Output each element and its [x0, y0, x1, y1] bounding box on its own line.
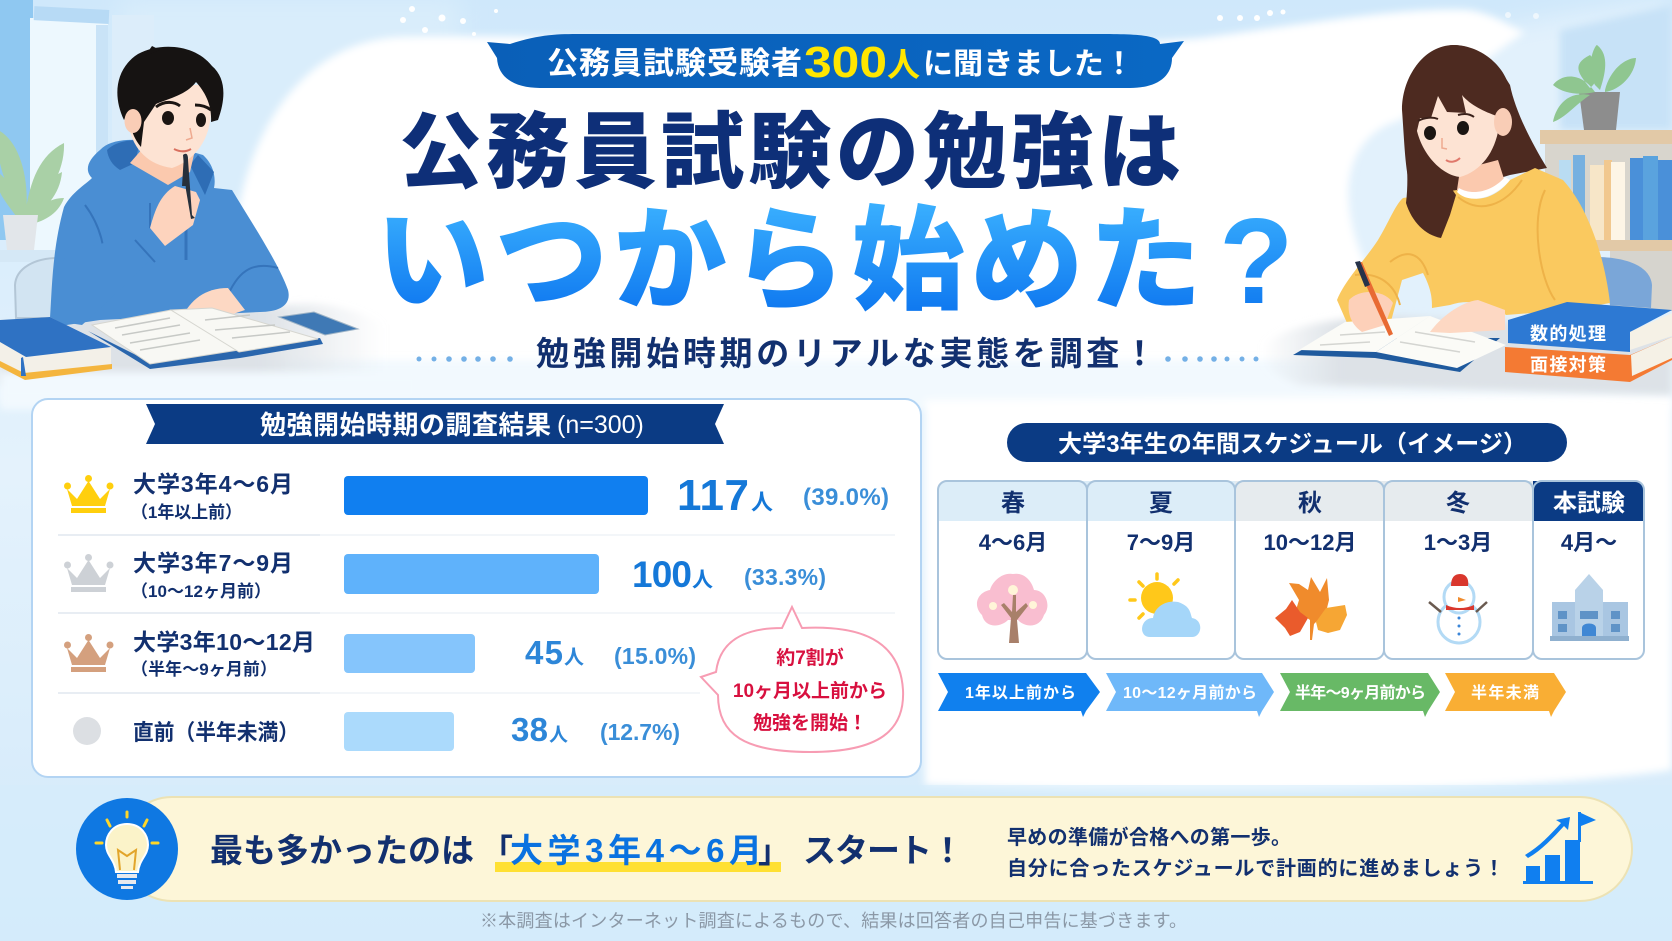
supporting message: 自分に合ったスケジュールで計画的に進めましょう！ [1007, 857, 1504, 880]
title underline [390, 317, 1250, 319]
blue book [0, 317, 111, 378]
row 2: July to September: 大学3年7〜9月 [133, 550, 293, 576]
row 2: July to September: 人 [692, 569, 713, 592]
row 1: April to June [64, 471, 889, 522]
neck [130, 140, 195, 185]
desk [0, 304, 385, 385]
eyes, brows, nose, mouth [162, 111, 174, 125]
supporting message: 早めの準備が合格への第一歩。 [1007, 825, 1291, 849]
column: autumn: 10〜12月 [1264, 530, 1356, 555]
main message [210, 832, 964, 872]
sweater [1337, 168, 1610, 325]
arrow: under half a year [1445, 673, 1566, 717]
top pill: survey intro: 300 [804, 38, 887, 87]
column: winter [1424, 490, 1492, 643]
row 3: October to December: (15.0%) [614, 643, 696, 669]
row 4: just before [73, 711, 680, 751]
row 4: just before: 人 [549, 725, 568, 746]
arrow: half year to 9 months: 半年〜9ヶ月前から [1295, 683, 1426, 702]
main message: 最も多かったのは [210, 832, 474, 869]
column: spring: 4〜6月 [979, 530, 1047, 555]
plant [0, 130, 64, 250]
panel heading ribbon: 勉強開始時期の調査結果 [260, 410, 551, 440]
main message: 大学3年4〜6月 [510, 832, 762, 869]
subtitle: 勉強開始時期のリアルな実態を調査！ [536, 335, 1156, 372]
icon: cherry tree [977, 574, 1047, 643]
icon: rising bars with flag [1523, 812, 1596, 884]
row 4: just before: 38 [511, 711, 548, 748]
illustration: female student [1260, 45, 1672, 395]
icon: maple leaves [1275, 577, 1347, 640]
column: winter: 1〜3月 [1424, 530, 1492, 555]
top pill: survey intro: 人 [887, 46, 920, 83]
row 2: July to September [64, 550, 826, 601]
title line 2: ? [1219, 193, 1294, 329]
panel: survey results [32, 399, 921, 777]
icon: grey circle [73, 717, 101, 745]
neck and collar [1457, 160, 1505, 196]
callout: about 70 percent: 勉強を開始！ [753, 712, 867, 734]
column: spring [977, 490, 1047, 643]
top pill: survey intro: に聞きました！ [923, 48, 1134, 81]
row 1: April to June: 大学3年4〜6月 [133, 471, 293, 497]
icon: bronze crown [64, 634, 114, 672]
arrow: under half a year: 半年未満 [1471, 683, 1539, 702]
row 2: July to September: （10〜12ヶ月前） [131, 582, 271, 601]
title line 2: いつから始めた [376, 198, 1202, 324]
front hair and bangs [1403, 45, 1512, 238]
column: main exam: 4月〜 [1561, 530, 1617, 555]
icon: school building [1550, 574, 1629, 641]
row 1: April to June: 人 [751, 490, 773, 515]
main message: スタート！ [803, 832, 964, 869]
hair [117, 47, 223, 147]
callout: about 70 percent [701, 607, 903, 752]
row 1: April to June: (39.0%) [803, 484, 889, 511]
row 3: October to December: 人 [564, 647, 584, 669]
main message: 」 [758, 833, 790, 869]
open book [88, 331, 323, 369]
icon: light bulb [76, 798, 178, 900]
column: summer: 7〜9月 [1127, 530, 1195, 555]
row 3: October to December: 大学3年10〜12月 [133, 629, 315, 655]
face [128, 85, 211, 168]
column: autumn: 秋 [1298, 490, 1322, 517]
chair [1600, 257, 1652, 308]
panel: yearly schedule table [938, 481, 1644, 659]
supporting message [1007, 825, 1504, 880]
chair [15, 258, 60, 318]
arrow: 10 to 12 months: 10〜12ヶ月前から [1123, 683, 1257, 702]
back hair [1402, 45, 1547, 200]
schedule heading: 大学3年生の年間スケジュール（イメージ） [1058, 431, 1527, 458]
face [1415, 75, 1500, 177]
row 1: April to June: （1年以上前） [131, 502, 242, 522]
footnote: ※本調査はインターネット調査によるもので、結果は回答者の自己申告に基づきます。 [480, 911, 1187, 931]
ear [124, 109, 142, 133]
hand on book [182, 288, 245, 320]
column: autumn [1264, 490, 1356, 640]
bottom callout bar [76, 797, 1632, 901]
title line 1: 公務員試験の勉強は [399, 106, 1181, 199]
column: spring: 春 [1001, 490, 1025, 517]
tablet [279, 312, 358, 335]
timeline arrows [938, 673, 1566, 717]
illustration: male student [0, 46, 420, 402]
callout: about 70 percent: 10ヶ月以上前から [733, 680, 887, 702]
column: main exam [1550, 490, 1629, 641]
icon: sun and cloud [1130, 574, 1200, 637]
row 4: just before: (12.7%) [600, 719, 680, 745]
book title: 面接対策: 面接対策 [1530, 355, 1606, 375]
hoodie [50, 140, 289, 326]
row 3: October to December: （半年〜9ヶ月前） [131, 659, 277, 679]
arm and hand [56, 228, 165, 325]
bookshelf [1540, 130, 1672, 311]
schedule heading [1007, 423, 1567, 462]
row 3: October to December [64, 629, 696, 679]
potted plant [1553, 45, 1636, 130]
column: main exam: 本試験 [1553, 490, 1625, 517]
column: summer: 夏 [1149, 490, 1173, 517]
top pill: survey intro: 公務員試験受験者 [547, 46, 802, 81]
row 4: just before: 直前（半年未満） [133, 720, 299, 745]
callout: about 70 percent: 約7割が [776, 646, 844, 669]
column: winter: 冬 [1446, 490, 1470, 517]
column: summer [1127, 490, 1200, 637]
hands and pen [1349, 292, 1393, 332]
panel heading ribbon: (n=300) [557, 411, 644, 439]
book title: 数的処理: 数的処理 [1530, 324, 1606, 344]
stacked books [1505, 302, 1672, 382]
desk [1260, 316, 1672, 395]
panel heading ribbon [146, 404, 724, 444]
icon: gold crown [64, 475, 114, 513]
icon: silver crown [64, 554, 114, 592]
row 1: April to June: 117 [677, 471, 749, 520]
row 2: July to September: (33.3%) [744, 564, 826, 590]
row 3: October to December: 45 [525, 634, 563, 671]
icon: snowman [1429, 574, 1487, 643]
arrow: 1 year or more: 1年以上前から [965, 683, 1076, 702]
arrow: half year to 9 months [1280, 673, 1440, 717]
ear [1494, 108, 1512, 136]
notebook [1293, 326, 1500, 372]
main message: 「 [481, 833, 513, 869]
arrow: 1 year or more [938, 673, 1100, 717]
row 2: July to September: 100 [632, 554, 692, 595]
facial features [1424, 126, 1436, 140]
top pill: survey intro [487, 34, 1184, 88]
arrow: 10 to 12 months [1106, 673, 1274, 717]
hoodie shading [66, 203, 278, 310]
